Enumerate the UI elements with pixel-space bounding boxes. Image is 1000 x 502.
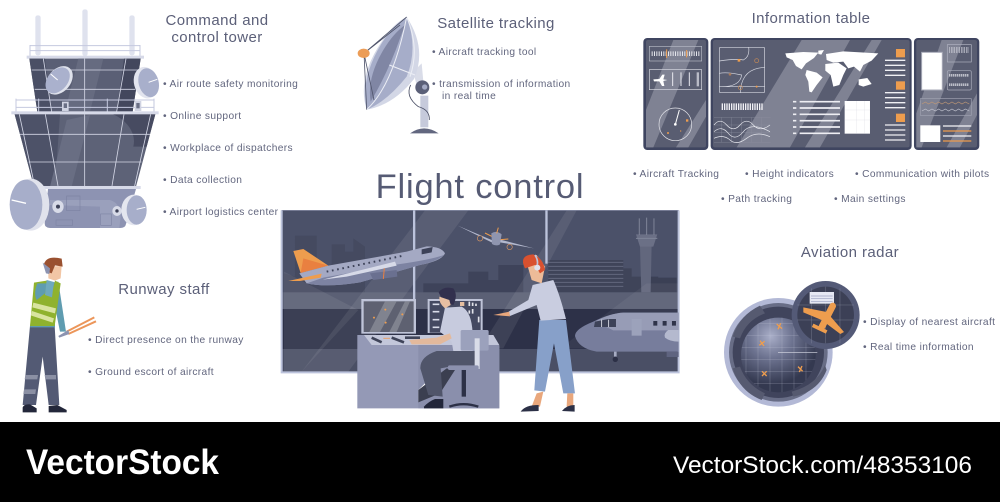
dish feed horn [358, 49, 370, 58]
heading: aviation radar: Aviation radar [801, 244, 899, 261]
illustration: control room scene [282, 210, 679, 412]
heading: satellite tracking: Satellite tracking [437, 15, 555, 32]
lower cab [11, 111, 159, 187]
list: information table functions: • Path tracking [721, 194, 792, 205]
upper cab [27, 56, 144, 112]
list: runway staff functions: • Direct presence on the runway [88, 335, 244, 346]
list: radar functions: • Real time information [863, 342, 974, 353]
heading: runway staff: Runway staff [118, 281, 210, 298]
seated operator [409, 288, 475, 408]
antennas [30, 9, 140, 56]
heading: command and control tower: Command and [165, 12, 269, 29]
footer url: VectorStock.com/48353106 [673, 452, 972, 479]
dish pedestal [409, 63, 439, 133]
right screen [914, 38, 979, 150]
footer logo: VectorStock [26, 443, 220, 482]
radar magnifier [792, 281, 860, 349]
distant airliner [458, 226, 534, 250]
monitors [361, 299, 483, 334]
list: satellite functions [432, 47, 571, 102]
world map [785, 50, 878, 92]
footer bar [0, 422, 1000, 502]
list: tower functions [163, 79, 298, 218]
large airliner [288, 246, 445, 285]
list: information table functions: • Aircraft Tracking [633, 169, 719, 180]
list: satellite functions: in real time [442, 91, 496, 102]
illustration: information table [643, 38, 979, 150]
list: tower functions: • Workplace of dispatchers [163, 143, 293, 154]
window view [282, 210, 679, 372]
list: tower functions: • Air route safety monitoring [163, 79, 298, 90]
list: runway staff functions [88, 335, 244, 378]
lower railing [16, 99, 154, 112]
staff trousers [23, 326, 67, 412]
staff shirt and vest [30, 280, 66, 332]
marshalling wands [58, 317, 96, 338]
illustration: satellite dish [358, 17, 439, 133]
list: information table functions: • Main settings [834, 194, 906, 205]
illustration: control tower [10, 9, 162, 231]
list: satellite functions: • transmission of information [432, 79, 571, 90]
office chair [448, 330, 489, 407]
list: information table functions: • Communication with pilots [855, 169, 989, 180]
list: radar functions [863, 317, 995, 353]
list: runway staff functions: • Ground escort of aircraft [88, 367, 214, 378]
dish bowl [364, 17, 419, 110]
parked aircraft [575, 313, 679, 362]
central screen [711, 38, 912, 150]
list: radar functions: • Display of nearest aircraft [863, 317, 995, 328]
list: information table functions [633, 169, 989, 205]
tower base [32, 186, 141, 228]
illustration: runway staff [23, 258, 96, 412]
illustration: aviation radar [724, 281, 860, 407]
heading: command and control tower: control tower [171, 29, 263, 46]
radar dial [724, 298, 833, 407]
staff head [43, 258, 63, 281]
title: flight control: Flight control [376, 168, 584, 206]
list: satellite functions: • Aircraft tracking tool [432, 47, 536, 58]
list: tower functions: • Airport logistics center [163, 207, 279, 218]
list: tower functions: • Data collection [163, 175, 242, 186]
heading: information table: Information table [752, 10, 870, 27]
list: information table functions: • Height indicators [745, 169, 834, 180]
list: tower functions: • Online support [163, 111, 241, 122]
left screen [643, 38, 708, 150]
satellite dishes on tower [10, 61, 162, 231]
control desk [357, 335, 499, 408]
standing supervisor [493, 254, 575, 412]
